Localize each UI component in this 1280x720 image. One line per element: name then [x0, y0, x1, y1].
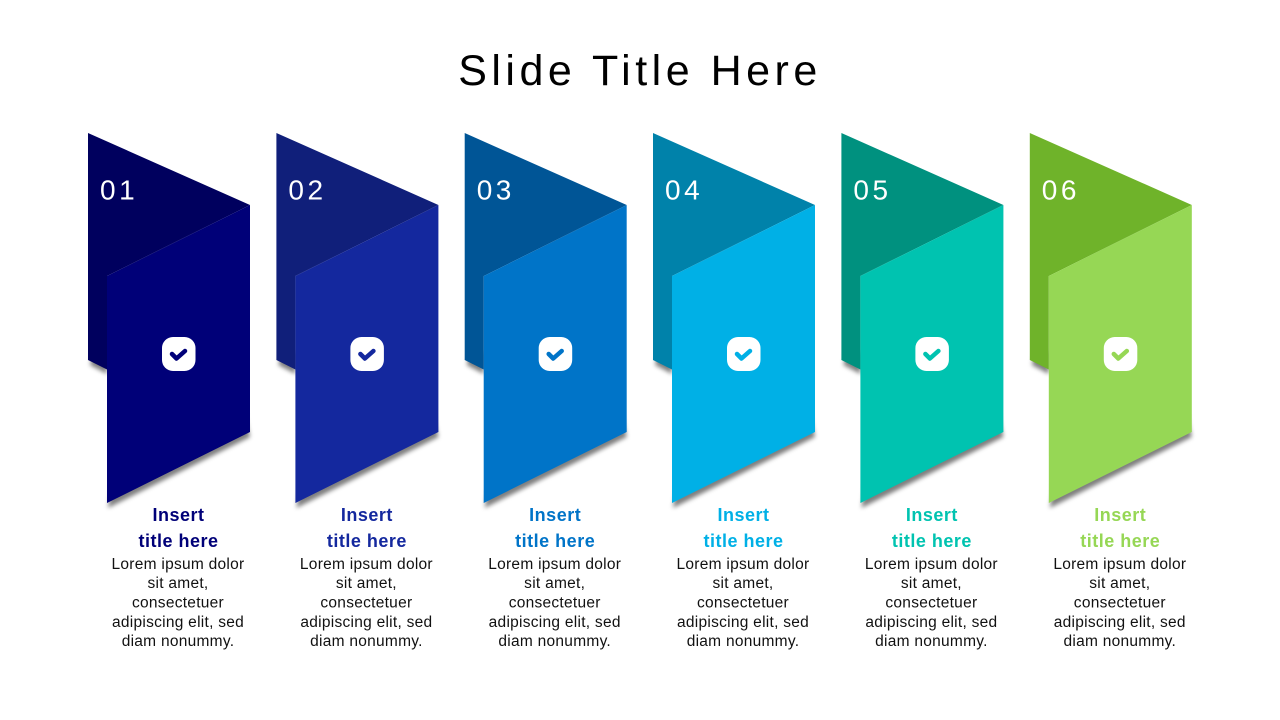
text block 02: adipiscing elit, sed: [300, 614, 432, 631]
text block 01: Lorem ipsum dolor: [112, 556, 244, 573]
text block 05: consectetuer: [885, 594, 977, 612]
panel: step 06: [1030, 133, 1192, 650]
text block 04: adipiscing elit, sed: [677, 614, 809, 631]
panel: step 05: [841, 133, 1003, 650]
text block 03: adipiscing elit, sed: [489, 614, 621, 631]
text block 04: consectetuer: [697, 594, 789, 612]
number 04: 04: [665, 174, 703, 206]
back fold 02: [276, 133, 438, 374]
icon: check badge 02: [350, 337, 384, 371]
heading 02: Insert: [341, 505, 393, 525]
title: Slide Title Here: [458, 47, 822, 95]
heading 06: title here: [1080, 531, 1160, 551]
text block 01: sit amet,: [147, 575, 209, 592]
text block 03: Lorem ipsum dolor: [488, 556, 621, 573]
icon: check badge 04: [727, 337, 760, 371]
text block 02: sit amet,: [336, 575, 397, 592]
text block 03: diam nonummy.: [498, 633, 611, 650]
panel: step 01: [88, 133, 250, 650]
text block 05: Lorem ipsum dolor: [865, 556, 998, 573]
heading 01: title here: [138, 531, 219, 551]
heading 02: title here: [327, 531, 407, 551]
heading 05: title here: [892, 531, 972, 551]
heading 04: Insert: [717, 505, 770, 525]
panel: step 04: [653, 133, 815, 650]
heading 03: Insert: [529, 505, 581, 525]
heading 06: Insert: [1094, 505, 1146, 525]
front fold 02: [295, 205, 438, 508]
front fold 05: [860, 205, 1003, 508]
heading 01: Insert: [152, 505, 205, 525]
front fold 06: [1049, 205, 1192, 508]
back fold 04: [653, 133, 815, 374]
back fold 01: [88, 133, 250, 374]
text block 02: consectetuer: [320, 594, 412, 612]
number 01: 01: [100, 174, 138, 206]
heading 05: Insert: [906, 505, 958, 525]
text block 02: Lorem ipsum dolor: [300, 556, 433, 573]
text block 01: consectetuer: [132, 594, 224, 612]
text block 03: consectetuer: [509, 594, 601, 612]
text block 05: sit amet,: [901, 575, 962, 592]
heading 04: title here: [703, 531, 784, 551]
number 05: 05: [853, 174, 892, 206]
text block 03: sit amet,: [524, 575, 585, 592]
number 03: 03: [477, 174, 515, 206]
text block 04: diam nonummy.: [687, 633, 799, 650]
text block 04: Lorem ipsum dolor: [677, 556, 809, 573]
text block 06: Lorem ipsum dolor: [1053, 556, 1186, 573]
icon: check badge 01: [162, 337, 196, 371]
icon: check badge 06: [1104, 337, 1137, 371]
text block 01: adipiscing elit, sed: [112, 614, 244, 631]
icon: check badge 05: [915, 337, 949, 371]
text block 01: diam nonummy.: [122, 633, 234, 650]
text block 04: sit amet,: [712, 575, 774, 592]
panel: step 03: [465, 133, 627, 650]
front fold 03: [484, 205, 627, 508]
back fold 03: [465, 133, 627, 374]
text block 05: diam nonummy.: [875, 633, 988, 650]
text block 06: consectetuer: [1074, 594, 1166, 612]
text block 06: sit amet,: [1089, 575, 1150, 592]
text block 05: adipiscing elit, sed: [865, 614, 997, 631]
front fold 01: [107, 205, 250, 508]
text block 06: diam nonummy.: [1063, 633, 1176, 650]
number 06: 06: [1042, 174, 1080, 206]
panel: step 02: [276, 133, 438, 650]
front fold 04: [672, 205, 815, 508]
text block 02: diam nonummy.: [310, 633, 423, 650]
heading 03: title here: [515, 531, 595, 551]
text block 06: adipiscing elit, sed: [1054, 614, 1186, 631]
back fold 06: [1030, 133, 1192, 374]
icon: check badge 03: [539, 337, 572, 371]
back fold 05: [841, 133, 1003, 374]
number 02: 02: [288, 174, 327, 206]
